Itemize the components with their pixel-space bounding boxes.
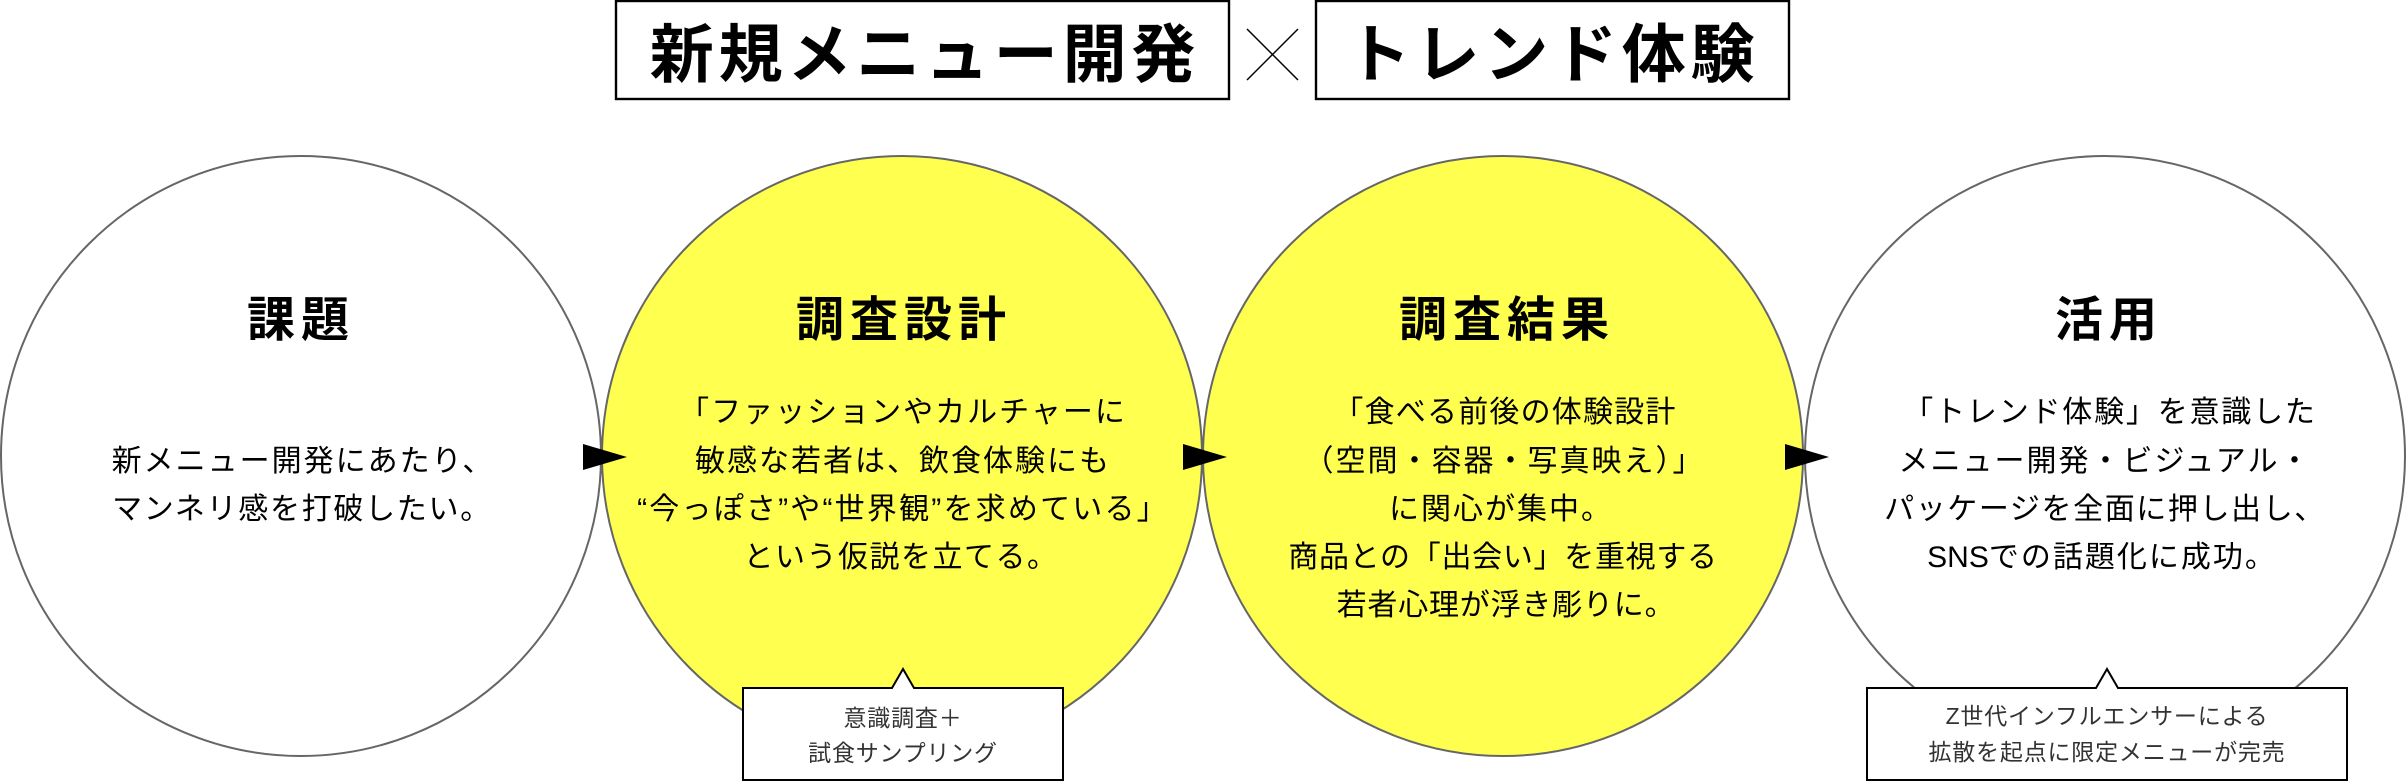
title box: new menu development [616,1,1229,99]
arrow: issue to research design [583,444,627,470]
panel: research results [1203,156,1803,756]
heading: research results: 調査結果 [1399,294,1615,347]
callout: influencer result: 拡散を起点に限定メニューが完売 [1928,739,2286,765]
text block: issue: 新メニュー開発にあたり、 [112,445,494,478]
text block: research results: 若者心理が浮き彫りに。 [1337,589,1675,622]
text block: research results [1288,396,1718,622]
text block: issue [112,445,494,526]
title box: new menu development: 新規メニュー開発 [650,19,1200,91]
callout: influencer result: Z世代インフルエンサーによる [1946,703,2268,729]
text block: application: 「トレンド体験」を意識した [1903,396,2317,429]
text block: application: パッケージを全面に押し出し、 [1884,493,2326,526]
text block: application [1884,396,2326,574]
text block: research results: （空間・容器・写真映え）」 [1304,445,1704,478]
arrow: results to application [1785,444,1829,470]
title box: trend experience [1316,1,1789,99]
text block: research design: “今っぽさ”や“世界観”を求めている」 [637,493,1169,526]
heading: application: 活用 [2055,294,2163,347]
text block: application: メニュー開発・ビジュアル・ [1898,445,2312,478]
callout: research method [743,669,1063,780]
text block: research results: 商品との「出会い」を重視する [1288,541,1718,574]
text block: research design: 「ファッションやカルチャーに [679,396,1127,429]
text block: application: SNSでの話題化に成功。 [1927,541,2277,574]
text block: research design [637,396,1169,574]
callout: research method: 試食サンプリング [808,740,998,766]
text block: research results: に関心が集中。 [1389,493,1613,526]
panel: research design [602,156,1202,756]
callout: research method: 意識調査＋ [844,705,962,731]
heading: research design: 調査設計 [796,294,1012,347]
panel: issue [1,156,601,756]
text block: research design: 敏感な若者は、飲食体験にも [695,445,1111,478]
callout: influencer result [1867,669,2347,780]
panel: application [1805,156,2405,756]
text block: research design: という仮説を立てる。 [744,541,1058,574]
multiplication sign [1247,29,1298,80]
arrow: research design to results [1183,444,1227,470]
text block: research results: 「食べる前後の体験設計 [1333,396,1677,429]
heading: issue: 課題 [247,294,355,347]
title box: trend experience: トレンド体験 [1347,19,1759,91]
text block: issue: マンネリ感を打破したい。 [112,493,492,526]
title [616,1,1789,99]
